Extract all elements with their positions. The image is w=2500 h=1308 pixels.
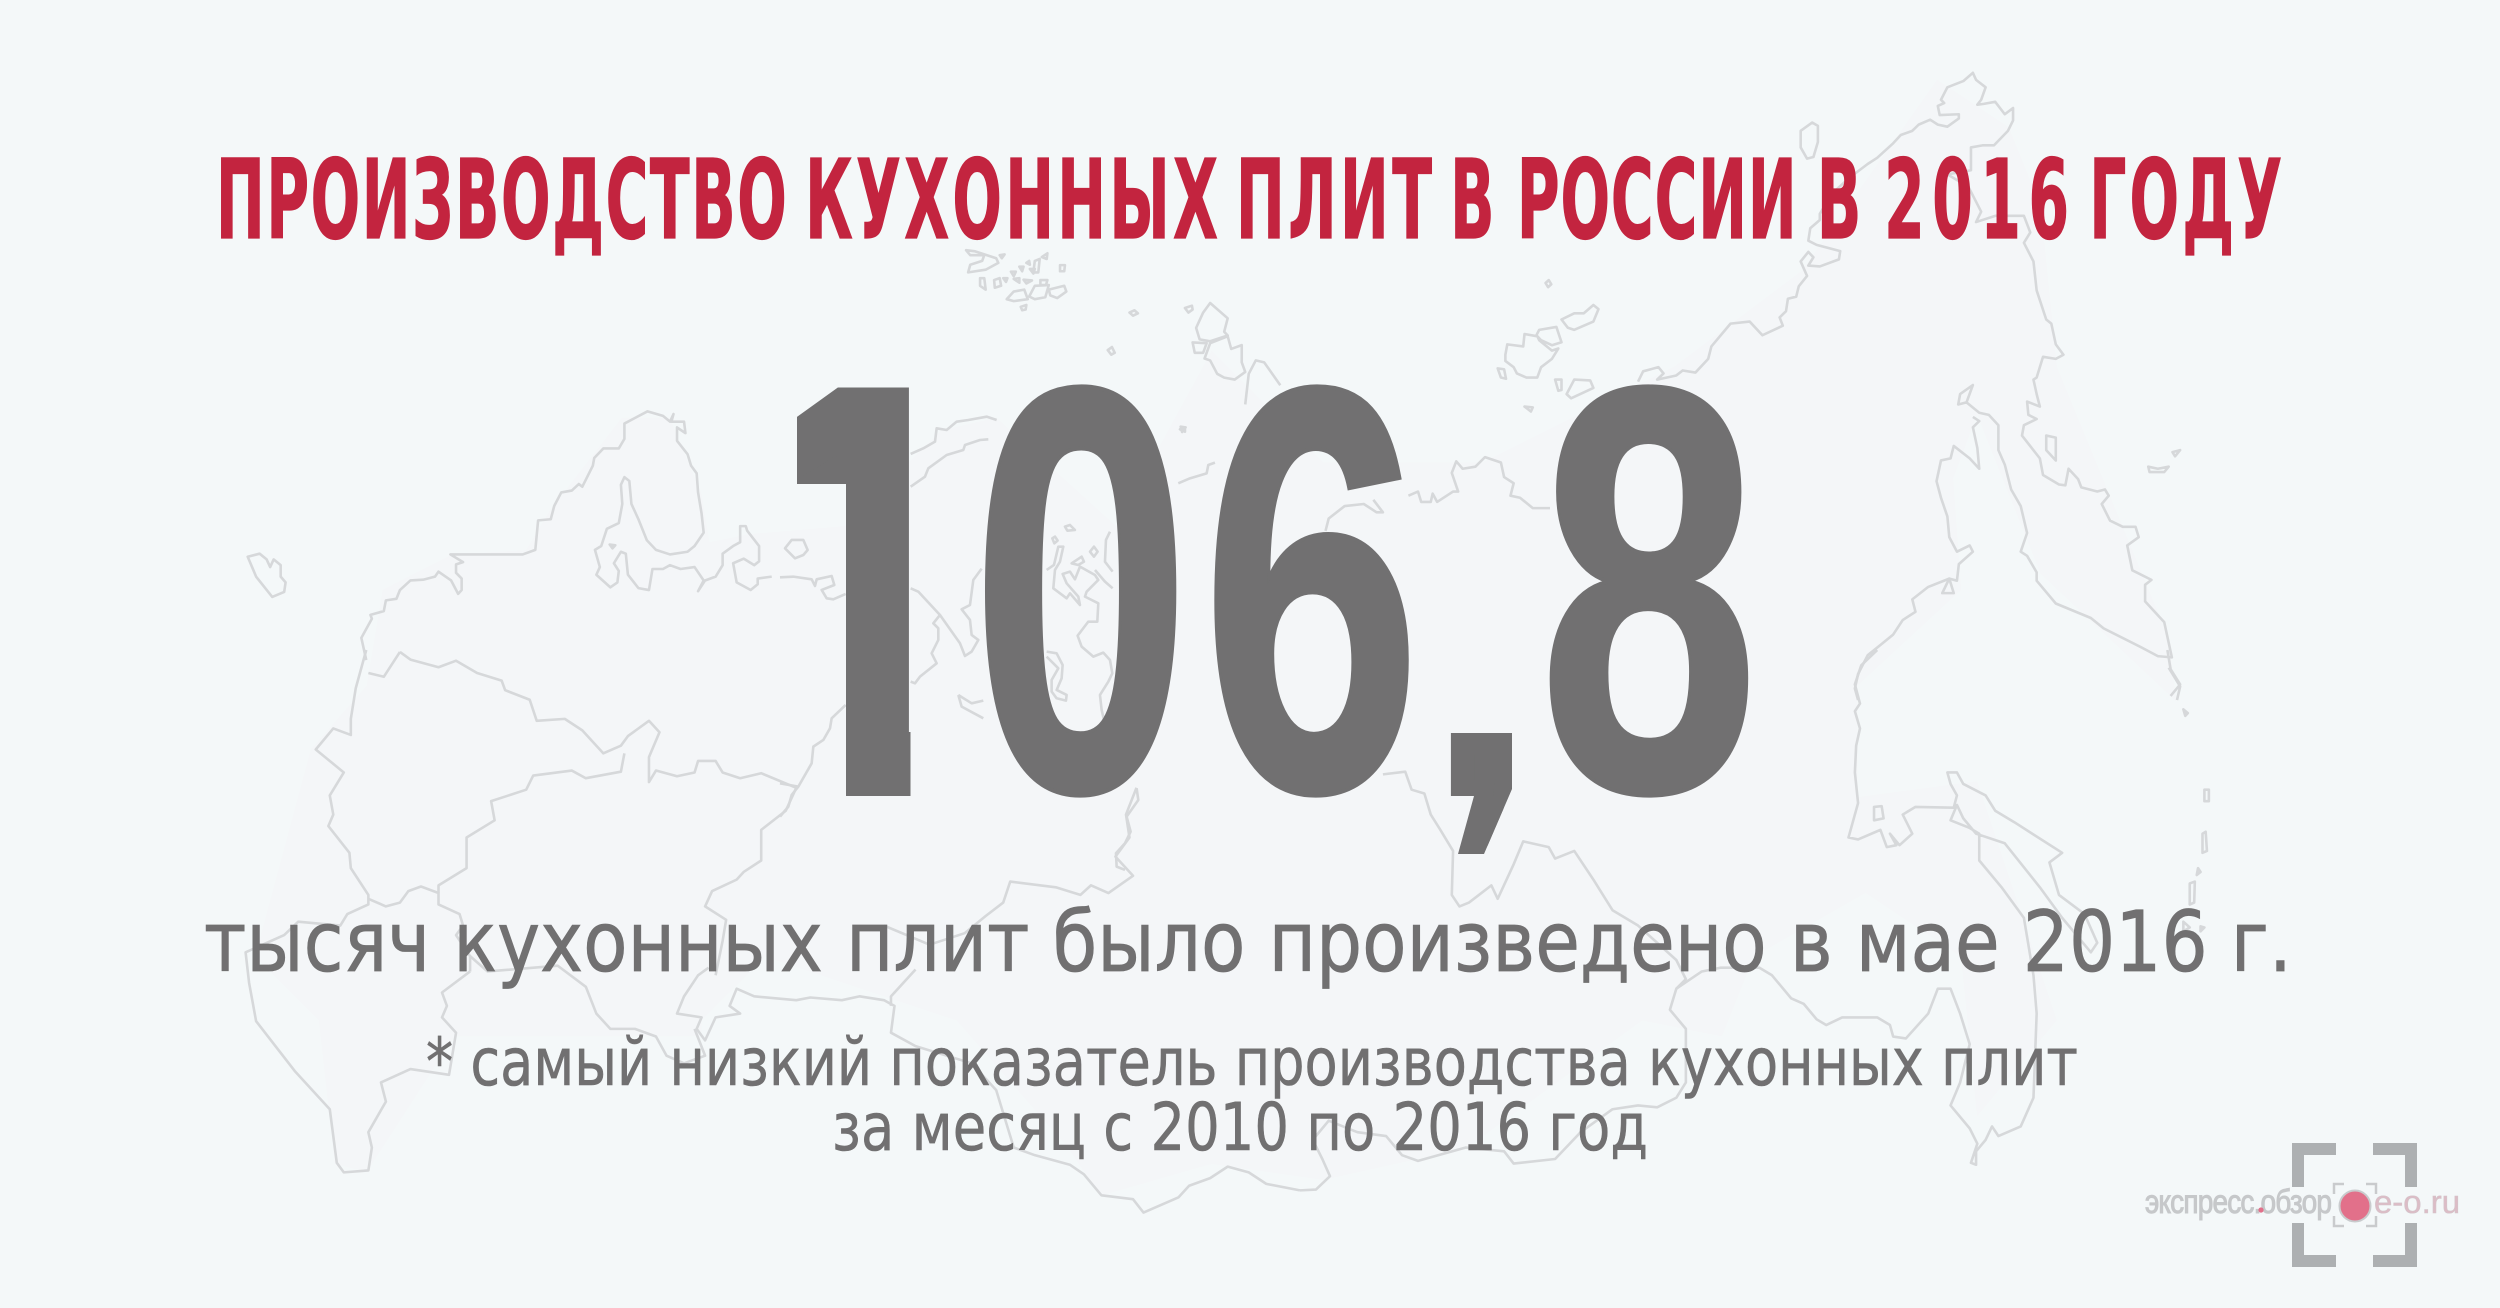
big number: 06 [971,268,1422,914]
title: ГОДУ [2089,136,2282,264]
big number: 8 [1538,268,1759,914]
big number: 1 [711,262,1005,919]
title: РОССИИ [1517,136,1797,264]
footnote: за месяц с 2010 по 2016 год [832,1089,1648,1166]
big number: , [1441,485,1526,866]
title: В [1450,136,1495,264]
title: ПРОИЗВОДСТВО [216,136,787,264]
map of Russia [246,73,2209,1213]
footnote [426,1024,2078,1166]
title: ПЛИТ [1236,136,1432,264]
big number [711,262,1759,919]
title: 2016 [1884,136,2069,264]
footnote: * самый низкий показатель производства кухонных плит [426,1024,2078,1101]
title: КУХОННЫХ [805,136,1218,264]
logo: e-o.ru: e-o.ru [2374,1184,2460,1220]
logo: e-o.ru: экспресс.обзор [2145,1184,2332,1221]
title: В [1817,136,1861,264]
logo: e-o.ru [2145,1149,2460,1261]
